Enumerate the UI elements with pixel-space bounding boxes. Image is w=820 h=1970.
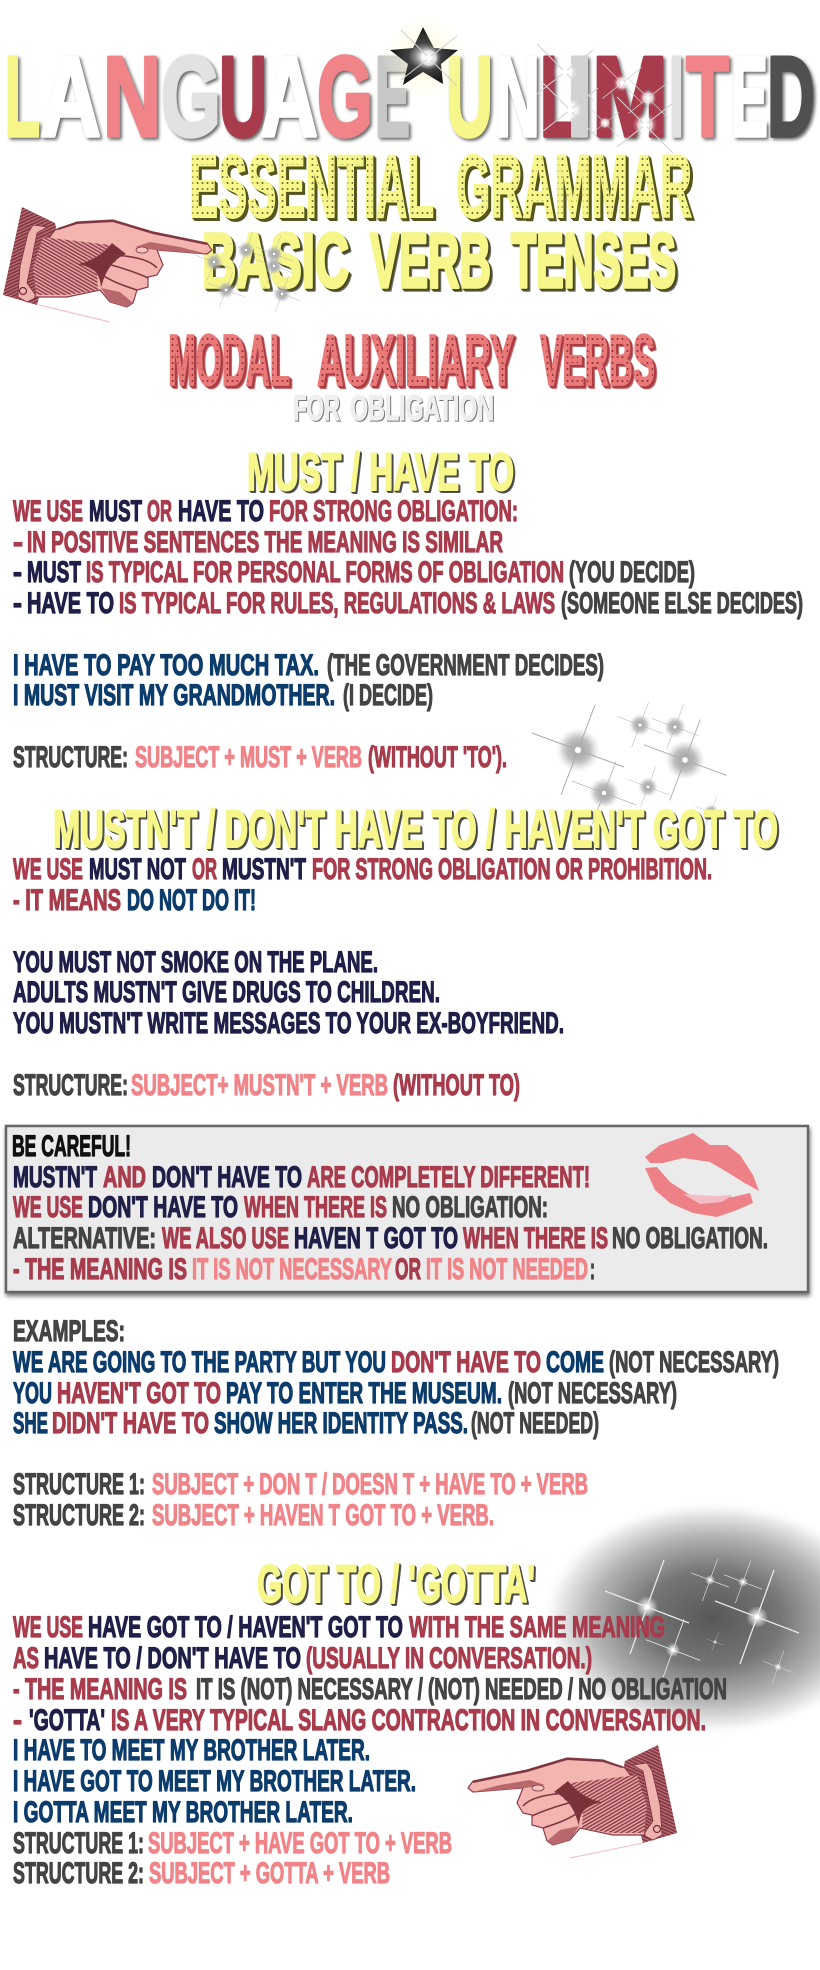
example 1: COME [546, 1346, 604, 1379]
example 2: (I DECIDE) [343, 679, 433, 712]
rule line 4: - [13, 587, 22, 620]
structure 1 [13, 1468, 588, 1501]
callout line 2: WHEN THERE IS [244, 1191, 387, 1224]
rule line 2 [13, 526, 503, 559]
rule line 1: WITH THE SAME MEANING [409, 1611, 665, 1644]
title: Language Unlimited: I [566, 34, 593, 161]
heading: Basic Verb Tenses: TENSES [511, 218, 676, 304]
rule line 1 [13, 853, 712, 886]
rule line 1: WE USE [13, 853, 83, 886]
callout line 1 [13, 1161, 590, 1194]
title: Language Unlimited: M [592, 34, 668, 161]
title: Language Unlimited: A [40, 34, 101, 161]
rule line 4: HAVE TO [27, 587, 114, 620]
examples [13, 946, 564, 1040]
rule line 4: IS TYPICAL FOR RULES, REGULATIONS & LAWS [119, 587, 555, 620]
icon: pointing hand bottom [468, 1745, 677, 1858]
callout line 4 [13, 1253, 595, 1286]
rule line 2 [13, 1642, 592, 1675]
heading: Basic Verb Tenses [202, 218, 676, 304]
text: VERBS [540, 321, 655, 401]
structure 1: STRUCTURE 1: [13, 1827, 144, 1860]
structure line: (WITHOUT 'TO'). [368, 741, 507, 774]
rule line 2: - IT MEANS [13, 884, 121, 917]
rule line 1: OR [192, 853, 217, 886]
examples: YOU MUST NOT SMOKE ON THE PLANE. [13, 946, 378, 979]
rule line 1: OR [147, 495, 172, 528]
title: Language Unlimited: I [669, 34, 684, 161]
rule line 1: HAVE TO [178, 495, 264, 528]
example 1: DON'T HAVE TO [391, 1346, 541, 1379]
title: Language Unlimited: G [161, 34, 221, 161]
callout line 4: IT IS NOT NECESSARY [192, 1253, 392, 1286]
callout line 4: : [590, 1253, 595, 1286]
subheading: for obligation: OBLIGATION [350, 389, 494, 428]
heading: Modal Auxiliary Verbs: AUXILIARY [317, 321, 514, 401]
callout line 1: DON'T HAVE TO [152, 1161, 302, 1194]
title: Language Unlimited: E [375, 34, 410, 161]
examples label: EXAMPLES: [13, 1315, 125, 1348]
rule line 3: (YOU DECIDE) [569, 556, 695, 589]
callout line 1: AND [103, 1161, 146, 1194]
rule line 4: - [13, 1704, 22, 1737]
title: Language Unlimited: N [103, 34, 161, 161]
title: Language Unlimited: N [495, 34, 540, 161]
rule line 2: (USUALLY IN CONVERSATION.) [306, 1642, 592, 1675]
structure line: SUBJECT + MUST + VERB [135, 741, 362, 774]
icon: pointing hand top [3, 207, 212, 322]
panel: be careful callout [6, 1126, 808, 1292]
callout line 3: ALTERNATIVE: [13, 1222, 156, 1255]
structure 2: SUBJECT + GOTTA + VERB [149, 1857, 390, 1890]
example 3: (NOT NEEDED) [471, 1407, 599, 1440]
title: Language Unlimited: E [731, 34, 768, 161]
subheading: for obligation: FOR [293, 389, 340, 428]
heading: must / have to: MUST / HAVE TO [247, 443, 514, 502]
callout line 1: MUSTN'T [13, 1161, 97, 1194]
panel: examples [13, 1315, 779, 1532]
example 3: SHE [13, 1407, 48, 1440]
examples: I GOTTA MEET MY BROTHER LATER. [13, 1796, 353, 1829]
examples: ADULTS MUSTN'T GIVE DRUGS TO CHILDREN. [13, 976, 440, 1009]
structure 2: SUBJECT + HAVEN T GOT TO + VERB. [152, 1499, 494, 1532]
example 3: SHOW HER IDENTITY PASS. [214, 1407, 468, 1440]
examples: I HAVE TO MEET MY BROTHER LATER. [13, 1734, 370, 1767]
sparkles at fingertip [196, 232, 300, 312]
callout line 2: NO OBLIGATION: [392, 1191, 548, 1224]
heading: got to / gotta: GOT TO / 'GOTTA' [257, 1555, 535, 1614]
rule line 3: - [13, 556, 22, 589]
rule line 1: FOR STRONG OBLIGATION: [269, 495, 518, 528]
be careful heading: BE CAREFUL! [12, 1130, 131, 1163]
example 2 [13, 1377, 677, 1410]
example 2: PAY TO ENTER THE MUSEUM. [226, 1377, 502, 1410]
example 1: I HAVE TO PAY TOO MUCH TAX. [13, 649, 319, 682]
rule line 2: IN POSITIVE SENTENCES THE MEANING IS SIMILAR [27, 526, 503, 559]
rule line 1: WE USE [13, 1611, 83, 1644]
rule line 2 [13, 884, 256, 917]
sparkles right of structure [532, 702, 727, 828]
structure 1: SUBJECT + HAVE GOT TO + VERB [148, 1827, 452, 1860]
callout line 2: DON'T HAVE TO [88, 1191, 238, 1224]
rule line 4: 'GOTTA' [29, 1704, 105, 1737]
callout line 1: ARE COMPLETELY DIFFERENT! [307, 1161, 590, 1194]
example 1: WE ARE GOING TO THE PARTY BUT YOU [13, 1346, 386, 1379]
structure 1: STRUCTURE 1: [13, 1468, 145, 1501]
structure line: SUBJECT+ MUSTN'T + VERB [131, 1069, 388, 1102]
callout line 3 [13, 1222, 768, 1255]
rule line 2: - [13, 526, 23, 559]
rule line 1: HAVE GOT TO / HAVEN'T GOT TO [88, 1611, 403, 1644]
rule line 2: HAVE TO / DON'T HAVE TO [44, 1642, 301, 1675]
panel: got to / gotta [13, 1555, 727, 1890]
title: Language Unlimited [5, 34, 815, 161]
rule line 3: - THE MEANING IS [13, 1673, 187, 1706]
icon: lipstick kiss [645, 1133, 759, 1217]
rule line 3: MUST [27, 556, 81, 589]
panel: mustn't / don't have to [13, 800, 778, 1102]
example 2: YOU [13, 1377, 52, 1410]
title: Language Unlimited: U [446, 34, 493, 161]
structure 2: STRUCTURE 2: [13, 1857, 144, 1890]
callout line 2: WE USE [13, 1191, 83, 1224]
title: Language Unlimited: U [219, 34, 267, 161]
heading: Modal Auxiliary Verbs [168, 321, 655, 401]
subheading: for obligation [293, 389, 494, 428]
rule line 1: MUST [89, 495, 142, 528]
example 2: I MUST VISIT MY GRANDMOTHER. [13, 679, 335, 712]
structure line: (WITHOUT TO) [393, 1069, 520, 1102]
sparkles over title [537, 44, 673, 153]
callout line 2 [13, 1191, 548, 1224]
example 2: (NOT NECESSARY) [508, 1377, 677, 1410]
structure 2 [13, 1499, 494, 1532]
structure 2: STRUCTURE 2: [13, 1499, 145, 1532]
callout line 4: OR [395, 1253, 421, 1286]
rule line 2: AS [13, 1642, 39, 1675]
callout line 4: IT IS NOT NEEDED [426, 1253, 588, 1286]
callout line 3: WE ALSO USE [162, 1222, 289, 1255]
structure line: STRUCTURE: [13, 741, 128, 774]
panel: must / have to [13, 443, 803, 774]
rule line 1: WE USE [13, 495, 83, 528]
example 2: HAVEN'T GOT TO [57, 1377, 221, 1410]
example 3: DIDN'T HAVE TO [52, 1407, 209, 1440]
example 3 [13, 1407, 599, 1440]
structure 2 [13, 1857, 390, 1890]
title: Language Unlimited: A [260, 34, 318, 161]
examples [13, 1734, 416, 1829]
rule line 2: DO NOT DO IT! [127, 884, 256, 917]
icon: black star [382, 16, 466, 100]
heading: Modal Auxiliary Verbs: MODAL [168, 321, 290, 401]
callout box [6, 1126, 808, 1292]
rule line 1: MUST NOT [89, 853, 186, 886]
rule line 1: MUSTN'T [222, 853, 306, 886]
rule line 1 [13, 495, 518, 528]
structure line: STRUCTURE: [13, 1069, 128, 1102]
grey glow with sparkles [540, 1500, 820, 1736]
callout line 3: WHEN THERE IS [463, 1222, 608, 1255]
heading: Basic Verb Tenses: VERB [370, 218, 491, 304]
callout line 3: HAVEN T GOT TO [294, 1222, 458, 1255]
heading: Basic Verb Tenses: BASIC [202, 218, 349, 304]
rule line 3 [13, 1673, 727, 1706]
heading: Essential Grammar: ESSENTIAL [189, 136, 434, 236]
structure 1 [13, 1827, 452, 1860]
title: Language Unlimited: G [317, 34, 373, 161]
title: Language Unlimited: L [540, 34, 579, 161]
examples: I HAVE GOT TO MEET MY BROTHER LATER. [13, 1765, 416, 1798]
example 1: (THE GOVERNMENT DECIDES) [327, 649, 604, 682]
callout line 4: - THE MEANING IS [13, 1253, 187, 1286]
title: Language Unlimited: T [686, 34, 729, 161]
title: Language Unlimited: L [5, 34, 40, 161]
